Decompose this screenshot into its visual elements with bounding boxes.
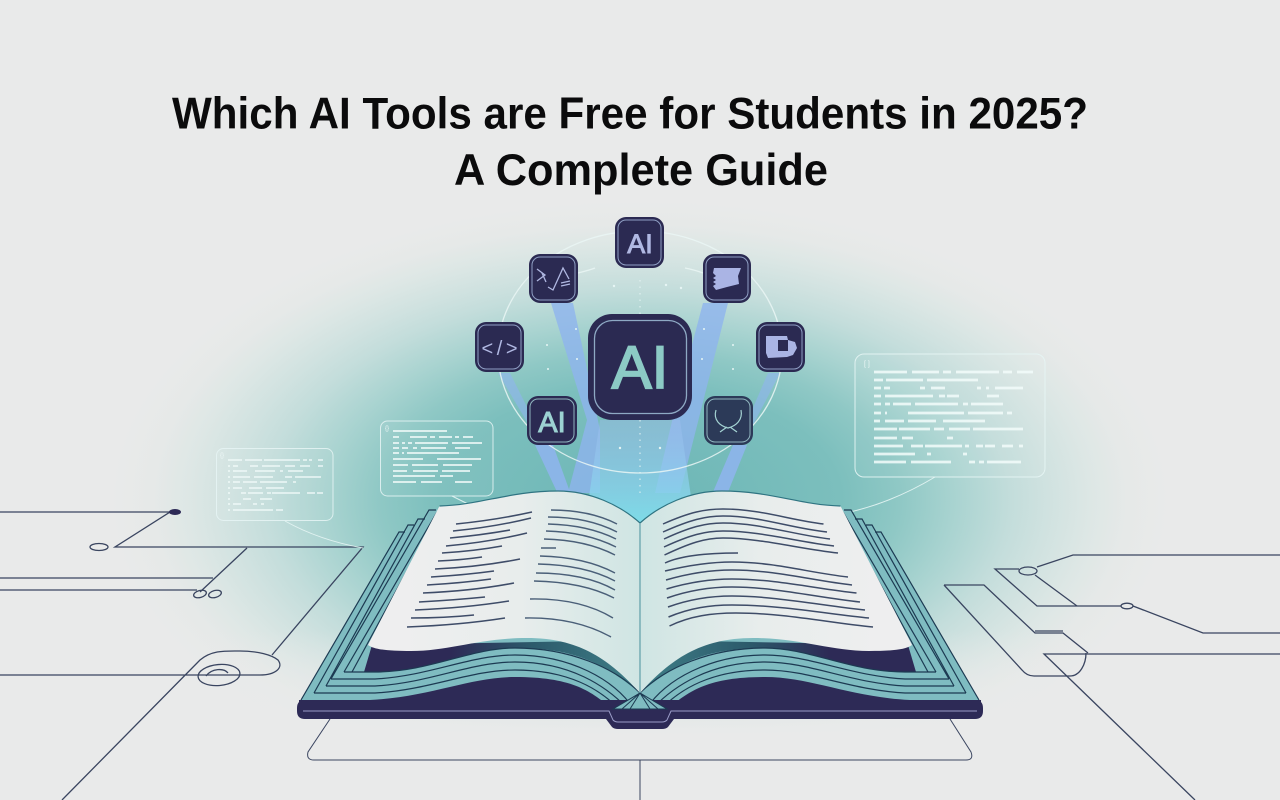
- callout: right code panel: [850, 354, 1045, 512]
- text lines: right page: [663, 509, 873, 627]
- cover highlight line: [303, 711, 977, 722]
- icon: top AI tile: AI: [627, 229, 653, 259]
- light beams: [498, 303, 780, 525]
- callout: middle code panel: [380, 421, 493, 505]
- circuit lines: under book: [308, 719, 972, 800]
- callout: left code panel: {}: [220, 453, 224, 459]
- icon: lower-left AI tile: [527, 396, 577, 445]
- icon: right chat tile: [756, 322, 805, 372]
- title: A Complete Guide: [454, 146, 828, 195]
- icon: central AI tile: AI: [612, 334, 668, 401]
- icon: top-left code glyph tile: [529, 254, 578, 303]
- callout: middle code panel: {}: [385, 426, 389, 432]
- title: [172, 90, 1088, 195]
- text lines: left page, right column: [525, 510, 617, 637]
- circuit lines: right: [944, 555, 1280, 800]
- text lines: left page, left column: [407, 512, 532, 627]
- icon: left code brackets tile: [475, 322, 524, 372]
- right half of book: [640, 491, 981, 712]
- icon: top AI tile: [615, 217, 664, 268]
- book cover base and spine: [297, 700, 983, 729]
- icon: left code brackets tile: </>: [482, 338, 518, 360]
- icon: lower-left AI tile: AI: [538, 407, 566, 439]
- icon: lower-right arc tile: [704, 396, 753, 445]
- circuit lines: left: [0, 509, 363, 800]
- centre gutter: [639, 523, 641, 693]
- callout: left code panel: [216, 448, 363, 548]
- icon: top-right notebook tile: [703, 254, 751, 303]
- left half of book: [299, 491, 640, 712]
- open book: [297, 491, 983, 729]
- spine stripes: [613, 693, 667, 709]
- orbit ring: [498, 231, 782, 473]
- orbit dots: [546, 280, 734, 493]
- title: Which AI Tools are Free for Students in 2025?: [172, 90, 1088, 138]
- callout: right code panel: [ ]: [864, 361, 870, 368]
- icon: central AI tile: [588, 314, 692, 420]
